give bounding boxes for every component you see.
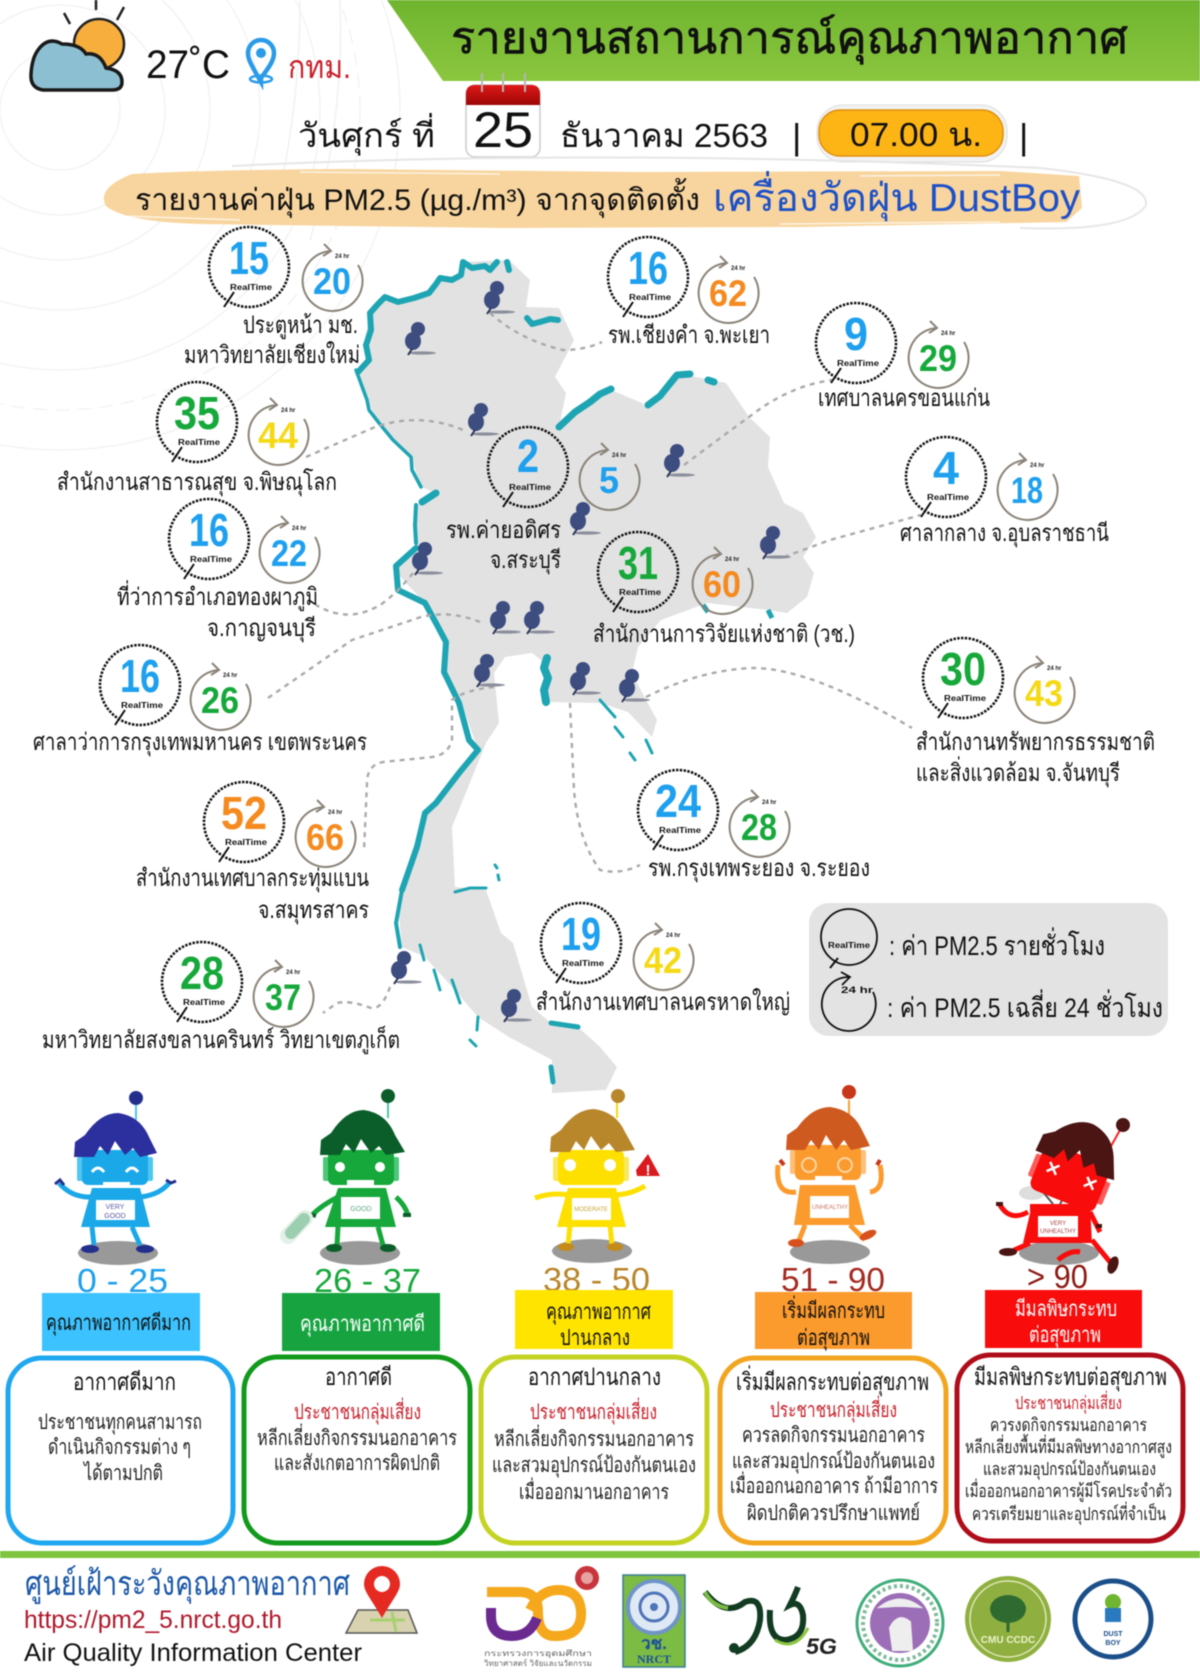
logo: OHEC 60: [483, 1566, 599, 1668]
subtitle brush band: [104, 157, 1146, 229]
station: Rayong: รพ.กรุงเทพระยอง จ.ระยอง: [648, 855, 870, 883]
label box: [985, 1290, 1142, 1348]
station: Saraburi: จ.สระบุรี: [490, 547, 561, 575]
station: Ubon Ratchathani: 18: [1011, 470, 1043, 511]
logo: Chiang Mai University seal: [857, 1580, 943, 1666]
time badge: [817, 105, 1007, 162]
logo: NRCT: วช.: [641, 1634, 667, 1653]
advice card: หลีกเลี่ยงกิจกรรมนอกอาคาร: [257, 1423, 457, 1450]
time badge: 07.00 น.: [850, 116, 982, 153]
icon: calendar: 25: [473, 102, 533, 158]
map of Thailand: [356, 260, 816, 1093]
logo: DustBoy: BOY: [1105, 1640, 1121, 1647]
level 4: sensitive: [720, 1085, 946, 1543]
logo: OHEC 60: กระทรวงการอุดมศึกษา: [484, 1649, 592, 1658]
station: Samut Sakhon: จ.สมุทรสาคร: [258, 897, 369, 925]
station: Phra Nakhon Bangkok: ศาลาว่าการกรุงเทพมหานคร เขตพระนคร: [33, 729, 367, 757]
robot: yellow: MODERATE: [574, 1207, 608, 1213]
label box: ปานกลาง: [560, 1325, 630, 1350]
label box: [282, 1293, 440, 1351]
label box: เริ่มมีผลกระทบ: [782, 1295, 885, 1323]
station: Phra Nakhon Bangkok: 16: [120, 650, 160, 702]
station: Phitsanulok: สำนักงานสาธารณสุข จ.พิษณุโลก: [57, 468, 337, 497]
station: Chiang Mai University gate: RealTime: [230, 283, 273, 292]
icon: weather sun and cloud: [31, 0, 124, 90]
robot: orange: UNHEALTHY: [812, 1205, 848, 1211]
subtitle brush band: เครื่องวัดฝุ่น DustBoy: [713, 171, 1080, 222]
label box: คุณภาพอากาศ: [546, 1299, 651, 1325]
station: Phra Nakhon Bangkok: 26: [201, 680, 239, 721]
station: Saraburi: 2: [517, 430, 539, 482]
legend: realtime symbol: RealTime: [828, 941, 871, 950]
station: Ubon Ratchathani: ศาลากลาง จ.อุบลราชธานี: [900, 520, 1109, 548]
robot: green: [288, 1089, 411, 1265]
robot: blue: VERY: [106, 1204, 125, 1211]
logo: NRCT: [623, 1575, 685, 1667]
icon: location pin: [248, 40, 274, 82]
level 2: good: [244, 1089, 470, 1543]
advice card: อากาศดี: [325, 1364, 392, 1391]
advice card: และสวมอุปกรณ์ป้องกันตนเอง: [732, 1449, 935, 1474]
station: Saraburi: [446, 427, 640, 575]
station: Samut Sakhon: 52: [221, 787, 267, 839]
advice card: ควรลดกิจกรรมนอกอาคาร: [742, 1424, 925, 1447]
station: Phuket: 24 hr: [286, 970, 301, 976]
station: Hat Yai: RealTime: [562, 959, 605, 968]
station: Phuket: 28: [180, 947, 224, 999]
station: Chanthaburi: 30: [940, 643, 986, 695]
month and year: ธันวาคม 2563: [560, 117, 768, 154]
station: Phitsanulok: 35: [174, 387, 220, 439]
advice card: ประชาชนกลุ่มเสี่ยง: [294, 1397, 421, 1425]
station: Phitsanulok: [57, 382, 337, 497]
station: Ubon Ratchathani: 24 hr: [1030, 463, 1045, 469]
station: Hat Yai: 42: [644, 940, 682, 981]
footer divider: [0, 1551, 1200, 1558]
advice card: ประชาชนทุกคนสามารถ: [38, 1411, 202, 1435]
level 1: very good: [8, 1091, 233, 1543]
station: Saraburi: 24 hr: [612, 453, 627, 459]
robot: green: GOOD: [350, 1206, 372, 1213]
station: NRCT: RealTime: [619, 588, 662, 597]
station: Khon Kaen: 24 hr: [941, 331, 956, 337]
station: Khon Kaen: RealTime: [837, 359, 880, 368]
label box: ต่อสุขภาพ: [797, 1325, 870, 1351]
advice card: [481, 1357, 707, 1543]
legend: realtime text: : ค่า PM2.5 รายชั่วโมง: [889, 927, 1105, 961]
label box: คุณภาพอากาศดีมาก: [46, 1310, 191, 1336]
station: Hat Yai: สำนักงานเทศบาลนครหาดใหญ่: [536, 988, 790, 1016]
label box: [42, 1293, 200, 1351]
footer english name: Air Quality Information Center: [24, 1639, 362, 1667]
station: Phayao: 24 hr: [731, 266, 746, 272]
icon: calendar: [466, 73, 540, 158]
advice card: เมื่อออกมานอกอาคาร: [519, 1477, 669, 1504]
station: Chiang Mai University gate: 20: [313, 261, 351, 302]
range: > 90: [1027, 1258, 1088, 1295]
advice card: เมื่อออกนอกอาคาร ถ้ามีอาการ: [730, 1471, 938, 1498]
logo: CMU CCDC: [965, 1576, 1051, 1662]
level 3: moderate: [481, 1089, 707, 1543]
advice card: [244, 1357, 470, 1543]
station: Phayao: 62: [709, 273, 747, 314]
logo: 5G: 5G: [806, 1634, 837, 1659]
logo: NRCT: NRCT: [637, 1652, 671, 1666]
location text: กทม.: [288, 49, 351, 85]
advice card: และสวมอุปกรณ์ป้องกันตนเอง: [492, 1453, 696, 1478]
robot: blue: GOOD: [104, 1213, 126, 1220]
advice card: ดำเนินกิจกรรมต่าง ๆ: [48, 1436, 191, 1459]
robot: red: UNHEALTHY: [1040, 1229, 1076, 1235]
station: Hat Yai: 24 hr: [666, 933, 681, 939]
advice card: [8, 1358, 233, 1543]
label box: มีมลพิษกระทบ: [1015, 1296, 1117, 1321]
station: Thong Pha Phum: ที่ว่าการอำเภอทองผาภูมิ: [117, 580, 318, 612]
subtitle brush band: รายงานค่าฝุ่น PM2.5 (µg./m³) จากจุดติดตั้ง: [135, 178, 700, 219]
advice card: ประชาชนกลุ่มเสี่ยง: [530, 1397, 657, 1425]
station: Khon Kaen: 29: [919, 338, 957, 379]
station: Chanthaburi: 24 hr: [1047, 666, 1062, 672]
advice card: [957, 1355, 1183, 1541]
station: Saraburi: RealTime: [509, 483, 552, 492]
station: Rayong: [638, 770, 870, 883]
station: Thong Pha Phum: RealTime: [190, 555, 233, 564]
station: Ubon Ratchathani: RealTime: [927, 493, 970, 502]
station: Saraburi: รพ.ค่ายอดิศร: [446, 517, 561, 544]
station: Samut Sakhon: [136, 782, 369, 925]
label box: ต่อสุขภาพ: [1029, 1322, 1101, 1348]
label box: คุณภาพอากาศดี: [300, 1311, 425, 1337]
legend: 24 hour symbol: 24 hr: [841, 985, 874, 995]
background watermark: [0, 0, 400, 450]
legend panel: [809, 903, 1168, 1036]
range: 38 - 50: [543, 1261, 650, 1298]
station: Thong Pha Phum: จ.กาญจนบุรี: [207, 615, 316, 643]
range: 0 - 25: [77, 1262, 168, 1299]
advice card: และสังเกตอาการผิดปกติ: [274, 1452, 440, 1475]
logo: DustBoy: [1075, 1581, 1151, 1657]
station: Thong Pha Phum: 22: [271, 533, 307, 574]
advice card: ผิดปกติควรปรึกษาแพทย์: [747, 1501, 920, 1525]
station: Samut Sakhon: 24 hr: [328, 810, 343, 816]
robot: blue: [55, 1091, 176, 1265]
station: Chiang Mai University gate: 24 hr: [335, 254, 350, 260]
advice card: อากาศปานกลาง: [528, 1364, 661, 1391]
station: Chiang Mai University gate: 15: [229, 232, 269, 284]
station: Saraburi: 5: [599, 460, 619, 501]
station: Khon Kaen: [816, 303, 990, 412]
station: Chanthaburi: [916, 638, 1155, 788]
station: Rayong: 28: [741, 807, 777, 848]
label box: [755, 1292, 912, 1351]
legend: 24 hour symbol: [822, 972, 876, 1031]
logo: DustBoy: DUST: [1103, 1631, 1123, 1638]
station: Thong Pha Phum: 24 hr: [292, 526, 307, 532]
station: Rayong: RealTime: [659, 826, 702, 835]
title banner: [387, 0, 1200, 81]
range: 26 - 37: [314, 1262, 421, 1299]
label box: [515, 1290, 673, 1350]
icon: map with red pin: [346, 1566, 417, 1633]
station: Phuket: [42, 942, 400, 1055]
station: Phayao: [608, 237, 770, 349]
advice card: ได้ตามปกติ: [82, 1461, 163, 1485]
station: Samut Sakhon: RealTime: [225, 838, 268, 847]
station: NRCT: 24 hr: [725, 557, 740, 563]
advice card: อากาศดีมาก: [73, 1369, 176, 1396]
station: Phra Nakhon Bangkok: 24 hr: [223, 673, 238, 679]
station: Hat Yai: [536, 903, 790, 1016]
robot: red: [996, 1108, 1131, 1275]
station: NRCT: 60: [703, 564, 741, 605]
station: Ubon Ratchathani: 4: [933, 442, 959, 494]
advice card: [720, 1358, 946, 1543]
station: Hat Yai: 19: [561, 908, 601, 960]
station: Thong Pha Phum: [117, 499, 320, 643]
range: 51 - 90: [781, 1261, 885, 1298]
station: Chanthaburi: RealTime: [944, 694, 987, 703]
station: Rayong: 24 hr: [762, 800, 777, 806]
separator: |: [792, 116, 801, 157]
station: Khon Kaen: เทศบาลนครขอนแก่น: [818, 385, 990, 412]
station: Chanthaburi: และสิ่งแวดล้อม จ.จันทบุรี: [916, 756, 1120, 788]
legend: realtime symbol: [821, 909, 877, 968]
station: Chanthaburi: 43: [1025, 673, 1063, 714]
station: Khon Kaen: 9: [844, 308, 868, 360]
station: Samut Sakhon: 66: [306, 817, 344, 858]
level 5: very unhealthy: [957, 1108, 1183, 1541]
advice card: หลีกเลี่ยงกิจกรรมนอกอาคาร: [494, 1424, 694, 1451]
title banner: รายงานสถานการณ์คุณภาพอากาศ: [451, 14, 1128, 65]
robot: orange: [778, 1085, 881, 1264]
station: Phayao: 16: [628, 242, 668, 294]
advice card: ควรงดกิจกรรมนอกอาคาร: [990, 1415, 1147, 1435]
footer center name: ศูนย์เฝ้าระวังคุณภาพอากาศ: [25, 1565, 350, 1604]
station: Phitsanulok: 24 hr: [281, 408, 296, 414]
pins: [391, 281, 791, 1022]
temperature: 27˚C: [146, 43, 230, 87]
station: Phuket: RealTime: [183, 998, 226, 1007]
advice card: ประชาชนกลุ่มเสี่ยง: [770, 1395, 897, 1423]
station: Phra Nakhon Bangkok: [33, 645, 367, 757]
robot: red: VERY: [1050, 1221, 1066, 1227]
logo: OHEC 60: วิทยาศาสตร์ วิจัยและนวัตกรรม: [483, 1658, 592, 1668]
station: Phra Nakhon Bangkok: RealTime: [121, 701, 164, 710]
separator: |: [1019, 116, 1028, 157]
advice card: ประชาชนกลุ่มเสี่ยง: [1015, 1390, 1122, 1414]
station: Phuket: มหาวิทยาลัยสงขลานครินทร์ วิทยาเขตภูเก็ต: [42, 1025, 400, 1055]
station: NRCT: สำนักงานการวิจัยแห่งชาติ (วช.): [593, 621, 855, 648]
station: NRCT: [593, 532, 855, 648]
station: Phayao: RealTime: [629, 293, 672, 302]
logo: 5G: [705, 1587, 837, 1659]
station: Thong Pha Phum: 16: [189, 504, 229, 556]
date text: วันศุกร์ ที่: [298, 113, 435, 156]
footer url: https://pm2_5.nrct.go.th: [24, 1606, 282, 1634]
station: Rayong: 24: [655, 775, 701, 827]
connectors: [268, 313, 921, 1013]
robot: yellow: !: [646, 1162, 650, 1179]
station: Chiang Mai University gate: มหาวิทยาลัยเชียงใหม่: [184, 341, 360, 369]
station: Phitsanulok: 44: [258, 415, 298, 456]
advice card: เริ่มมีผลกระทบต่อสุขภาพ: [736, 1365, 929, 1397]
station: Phitsanulok: RealTime: [178, 438, 221, 447]
station: NRCT: 31: [618, 537, 658, 589]
logo: CMU CCDC: CMU CCDC: [981, 1635, 1035, 1646]
station: Chiang Mai University gate: ประตูหน้า มช.: [243, 312, 358, 340]
station: Phuket: 37: [265, 977, 301, 1018]
station: Phayao: รพ.เชียงคำ จ.พะเยา: [608, 322, 770, 349]
station: Ubon Ratchathani: [900, 437, 1109, 548]
station: Chiang Mai University gate: [184, 227, 363, 369]
station: Samut Sakhon: สำนักงานเทศบาลกระทุ่มแบน: [136, 865, 369, 893]
robot: yellow: [535, 1089, 660, 1263]
